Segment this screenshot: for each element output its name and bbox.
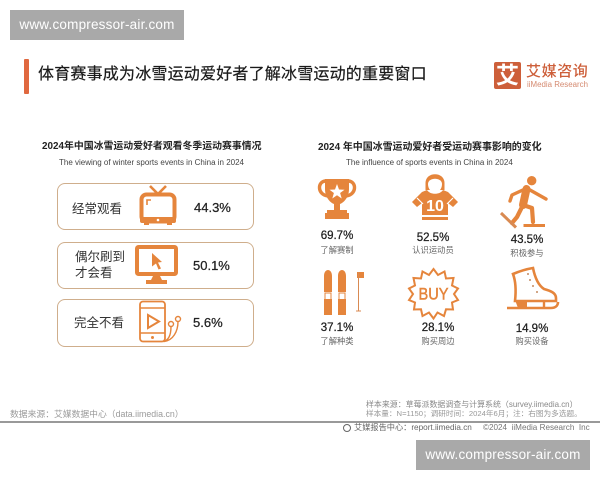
- stat: buy equipment: [507, 266, 560, 346]
- logo: [494, 62, 588, 89]
- footer credits: 艾媒报告中心：report.iimedia.cn: [354, 423, 472, 432]
- icon: monitor: [135, 245, 178, 284]
- right heading: 2024 年中国冰雪运动爱好者受运动赛事影响的变化: [318, 142, 542, 153]
- footer icon: [343, 424, 351, 432]
- label: 购买设备: [515, 336, 549, 346]
- value: 37.1%: [321, 322, 353, 334]
- sample size note: 样本量：N=1150；调研时间：2024年6月；注：右图为多选题。: [366, 409, 582, 418]
- stat: buy merch: [408, 268, 460, 346]
- watermark bottom: [416, 440, 590, 470]
- watermark top: www.compressor-air.com: [19, 17, 175, 32]
- value: often watch: 44.3%: [194, 200, 231, 215]
- data source: 数据来源：艾媒数据中心（data.iimedia.cn）: [10, 409, 184, 419]
- left subheading: The viewing of winter sports events in China in 2024: [59, 158, 244, 167]
- icon: tv: [140, 185, 176, 225]
- title: 体育赛事成为冰雪运动爱好者了解冰雪运动的重要窗口: [38, 66, 427, 83]
- icon: jersey player: [412, 174, 458, 220]
- icon: ice skate: [507, 266, 560, 310]
- label: occasionally: [75, 250, 125, 280]
- value: 28.1%: [422, 322, 454, 334]
- watermark bottom: www.compressor-air.com: [425, 447, 581, 462]
- sample source: 样本来源：草莓派数据调查与计算系统（survey.iimedia.cn）: [366, 400, 578, 409]
- right subheading: The influence of sports events in China in 2024: [346, 158, 513, 167]
- label: 了解赛制: [320, 245, 354, 255]
- logo mark: 艾: [496, 62, 519, 88]
- label: 购买周边: [421, 336, 455, 346]
- value: 52.5%: [417, 232, 449, 244]
- value: never: 5.6%: [193, 315, 223, 330]
- label: occasionally: 偶尔刷到: [75, 250, 125, 264]
- stat: know athletes: [412, 174, 458, 255]
- stat: learn events: [318, 179, 356, 255]
- stat: participate: [500, 176, 548, 258]
- icon: walking skier: [500, 176, 548, 229]
- left heading: 2024年中国冰雪运动爱好者观看冬季运动赛事情况: [42, 141, 261, 152]
- panel: never: [57, 299, 254, 347]
- logo english: iiMedia Research: [527, 80, 588, 89]
- logo name: 艾媒咨询: [526, 63, 588, 80]
- label: often watch: 经常观看: [72, 202, 122, 216]
- icon: jersey player: 10: [426, 198, 444, 215]
- icon: buy badge: BUY: [418, 284, 448, 304]
- label: occasionally: 才会看: [75, 266, 113, 280]
- watermark top: [10, 10, 184, 40]
- label: 认识运动员: [412, 245, 454, 255]
- footer line: [0, 421, 600, 422]
- stat: learn types: [320, 270, 364, 346]
- panel: occasionally: [57, 242, 254, 289]
- label: 了解种类: [320, 336, 354, 346]
- label: never: 完全不看: [74, 316, 124, 330]
- value: 14.9%: [516, 323, 548, 335]
- icon: buy badge: [408, 268, 460, 320]
- label: 积极参与: [510, 248, 544, 258]
- value: 69.7%: [321, 230, 353, 242]
- icon: trophy: [318, 179, 356, 219]
- value: 43.5%: [511, 234, 543, 246]
- copyright: ©2024 iiMedia Research Inc: [483, 423, 590, 432]
- panel: often watch: [57, 183, 254, 230]
- value: occasionally: 50.1%: [193, 258, 230, 273]
- icon: skis: [324, 270, 364, 315]
- icon: phone: [139, 300, 182, 342]
- title accent bar: [24, 59, 29, 94]
